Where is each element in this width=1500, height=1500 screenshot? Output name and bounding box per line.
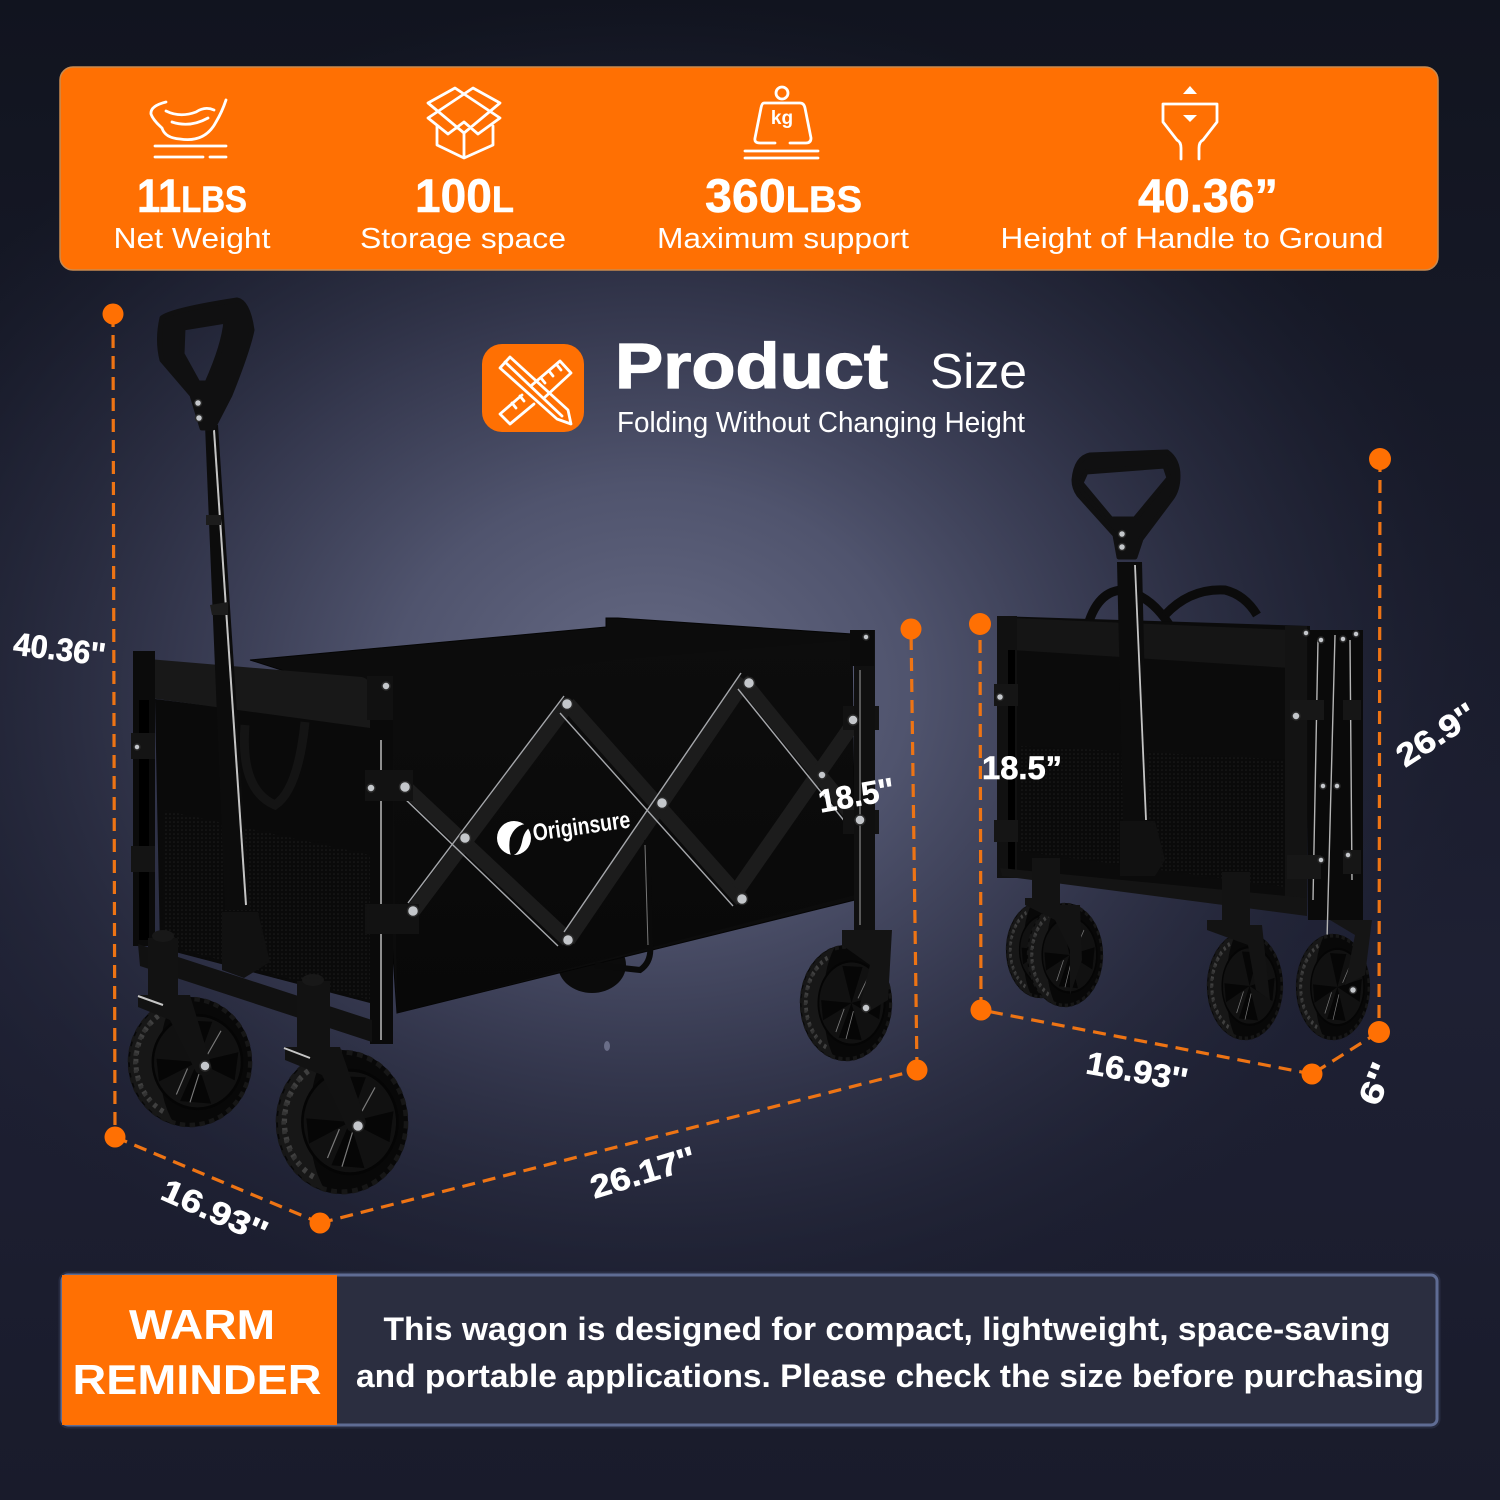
panel glow [62, 1275, 1437, 1425]
dimension labels [11, 626, 1483, 1250]
kg label: kg [771, 108, 793, 129]
front panel [997, 616, 1310, 914]
reminder text: and portable applications. Please check the size before purchasing [356, 1358, 1424, 1394]
title: Product: Product [615, 330, 888, 402]
caster stem: rear left [138, 930, 212, 1076]
mesh pocket [1020, 746, 1293, 888]
handle grip [160, 300, 252, 428]
caster stem: front left [284, 974, 366, 1134]
logo mark [497, 821, 532, 859]
handle [160, 300, 270, 978]
subtitle: Folding Without Changing Height [617, 407, 1025, 439]
left post [994, 616, 1018, 878]
spec: net weight [114, 100, 270, 255]
wheel: rear left [128, 997, 252, 1127]
stat: 40.36 inches: 40.36” [1138, 169, 1278, 222]
brand name: Originsure [531, 807, 632, 847]
product: folded wagon [994, 452, 1372, 1040]
pull bar under wagon [595, 840, 650, 970]
dim line: handle height [113, 314, 115, 1137]
right post and folded scissor [1285, 626, 1363, 940]
label: 18.5 folded: 18.5” [982, 750, 1062, 786]
title: Size: Size [930, 345, 1027, 399]
bottom frame bar [138, 944, 372, 1042]
dimension end dots [102, 304, 1391, 1234]
bottom frame bar [1000, 868, 1307, 916]
front post [367, 676, 393, 1044]
dim line: folded height [980, 624, 981, 1010]
heading: product size [482, 330, 1027, 439]
floor speck [604, 1041, 610, 1051]
label: maximum support: Maximum support [657, 223, 909, 255]
rear left post [131, 651, 155, 946]
product: large wagon [128, 300, 892, 1194]
dimension lines [102, 304, 1391, 1234]
near side panel [392, 640, 855, 1013]
stat: 11 LBS: 11LBS [137, 169, 247, 222]
icon: pan weight [151, 100, 226, 157]
spec: maximum support [657, 87, 909, 255]
label: 18.5 large wagon: 18.5'' [816, 771, 897, 819]
reminder text: This wagon is designed for compact, lightweight, space-saving [384, 1311, 1390, 1347]
spec: storage space [360, 88, 566, 255]
badge title [72, 1301, 322, 1403]
badge title: REMINDER [72, 1356, 322, 1403]
rivets [367, 678, 865, 946]
dim line: wagon height [911, 629, 917, 1070]
wheel: left pair [1006, 858, 1103, 1007]
icon: open box [428, 88, 500, 158]
clamps [365, 706, 879, 934]
top rail [148, 659, 370, 728]
label: net weight: Net Weight [114, 223, 270, 255]
label: 6: 6'' [1351, 1058, 1400, 1110]
wheel: front left [276, 1050, 408, 1194]
badge title: WARM [129, 1301, 275, 1348]
straps [1083, 590, 1257, 650]
far wheel [558, 937, 626, 993]
panel: key specs bar [60, 67, 1438, 270]
panel background [62, 1275, 1437, 1425]
panel: warm reminder [62, 1275, 1437, 1425]
scissor frame [365, 630, 879, 946]
stat: 360 LBS: 360LBS [705, 169, 862, 222]
label: 26.17: 26.17'' [586, 1139, 700, 1205]
dim line: folded total height [1379, 459, 1380, 1032]
handle grip [1074, 452, 1178, 557]
label: 16.93 folded: 16.93'' [1084, 1045, 1190, 1098]
label: 16.93 left: 16.93'' [156, 1172, 273, 1250]
label: 26.9: 26.9'' [1389, 696, 1483, 774]
wheel: right [1296, 920, 1372, 1040]
icon: ruler and pencil [482, 344, 584, 432]
dim line: wagon length [320, 1070, 917, 1223]
spec: handle height [1000, 86, 1384, 255]
post right [850, 630, 875, 930]
top rail [1012, 618, 1290, 668]
wheel: center [1207, 872, 1283, 1040]
dim line: folded depth [1312, 1032, 1379, 1074]
rear panel with mesh pocket [155, 699, 370, 1003]
reminder text [356, 1311, 1424, 1394]
handle [1074, 452, 1178, 876]
stat: 100 L: 100L [415, 169, 514, 222]
logo: Originsure [497, 807, 632, 859]
wheel: front right [800, 945, 892, 1061]
icon: kg weight [745, 87, 818, 158]
caster stem: front right [842, 930, 892, 1012]
orange badge [62, 1275, 337, 1425]
dim line: folded width [981, 1010, 1312, 1074]
icon: handle [1163, 86, 1217, 159]
label: storage space: Storage space [360, 223, 566, 255]
label: handle height: Height of Handle to Ground [1000, 223, 1384, 255]
dim line: wagon width [115, 1137, 320, 1223]
label: 40.36: 40.36'' [11, 626, 107, 673]
interior back panel [250, 618, 855, 1013]
